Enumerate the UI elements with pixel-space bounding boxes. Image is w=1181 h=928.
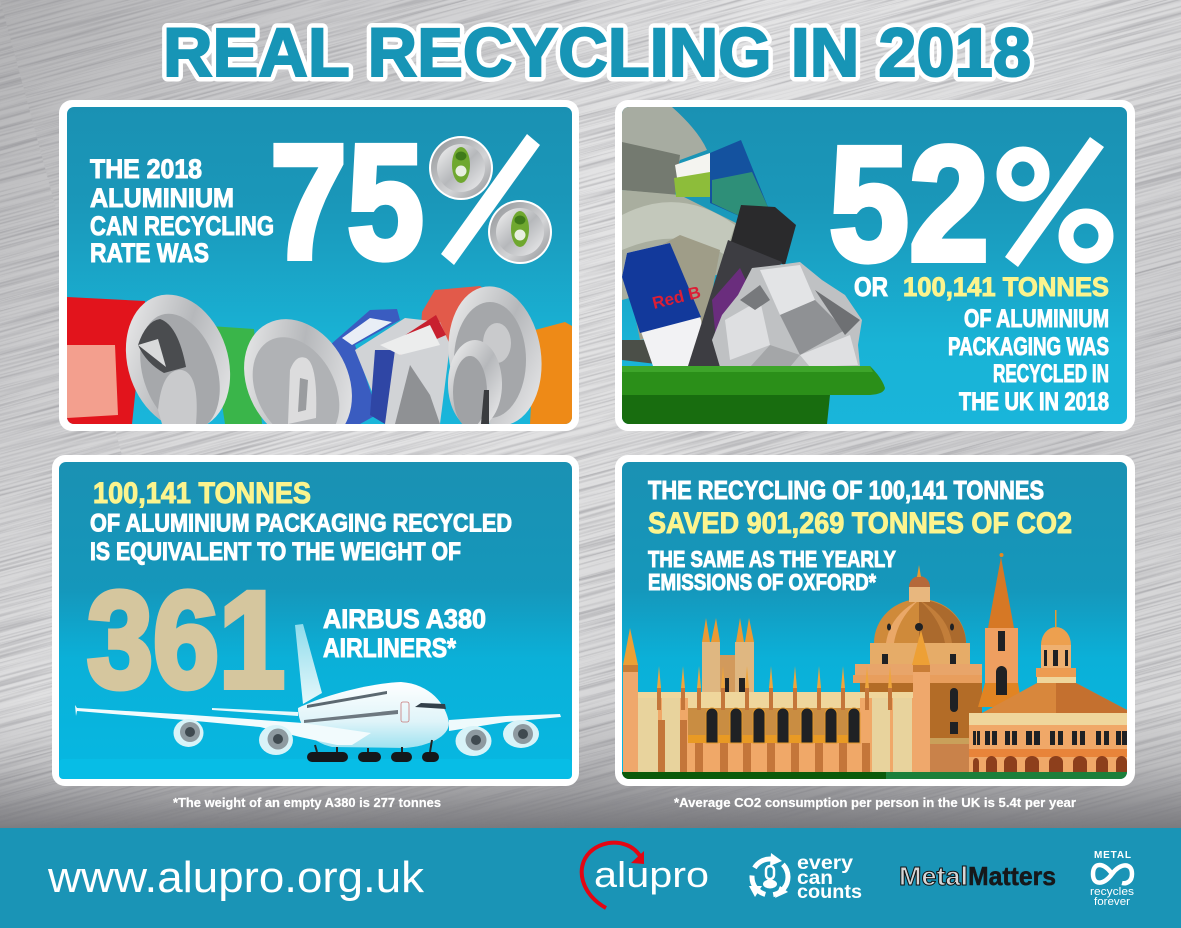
heading: can recycling rate: CAN RECYCLING: [90, 211, 274, 241]
stat: 75 percent: [270, 110, 552, 293]
logo: metal recycles forever: forever: [1094, 896, 1130, 908]
logo: metal recycles forever: recycles: [1090, 886, 1135, 898]
heading: can recycling rate: RATE WAS: [90, 238, 209, 268]
logo: alupro: [582, 843, 709, 908]
text: tonnes recycled: 100,141 TONNES: [903, 272, 1109, 302]
panel: aluminium packaging recycled: [615, 100, 1135, 431]
panel: airbus equivalent: [52, 455, 579, 786]
logo: metal matters: Metal: [899, 861, 968, 891]
text: weight comparison: [90, 477, 512, 566]
logo: alupro: alupro: [594, 854, 709, 895]
text: tonnes recycled: RECYCLED IN: [993, 360, 1109, 388]
footnote: co2 per person: *Average CO2 consumption per person in the UK is 5.4t per year: [674, 796, 1076, 810]
stat: 52 percent: 52: [829, 112, 989, 295]
logo: every can counts: [749, 853, 862, 903]
text: tonnes recycled: [854, 272, 1109, 416]
church spire: [978, 553, 1022, 707]
text: co2 savings: THE SAME AS THE YEARLY: [648, 546, 896, 572]
logo: metal recycles forever: [1090, 850, 1135, 908]
text: tonnes recycled: PACKAGING WAS: [948, 333, 1109, 361]
logo: every can counts: counts: [797, 882, 862, 903]
logo: metal recycles forever: METAL: [1094, 850, 1131, 861]
label: airbus a380 airliners: AIRLINERS*: [323, 633, 456, 663]
heading: can recycling rate: THE 2018: [90, 154, 202, 184]
text: tonnes recycled: THE UK IN 2018: [959, 388, 1109, 416]
logo: metal matters: Matters: [968, 861, 1056, 891]
logo: every can counts: every: [797, 853, 853, 874]
logo: metal matters: [899, 861, 1056, 891]
panel: co2 saved: [615, 455, 1135, 786]
ground: [622, 772, 1127, 779]
title: REAL RECYCLING IN 2018: [163, 14, 1031, 91]
heading: can recycling rate: [90, 154, 274, 268]
image: crushed cans: [67, 286, 572, 424]
text: weight comparison: IS EQUIVALENT TO THE WEIGHT OF: [90, 538, 461, 566]
corner towers: [623, 628, 930, 772]
text: tonnes recycled: OR: [854, 272, 888, 302]
label: airbus a380 airliners: AIRBUS A380: [323, 604, 486, 634]
text: co2 savings: EMISSIONS OF OXFORD*: [648, 569, 876, 595]
image: airbus a380: [75, 624, 561, 762]
website url: www.alupro.org.uk: [47, 853, 425, 902]
illustration: oxford skyline: [622, 553, 1127, 779]
text: weight comparison: 100,141 TONNES: [93, 477, 311, 510]
radcliffe rotunda: [969, 610, 1127, 772]
heading: can recycling rate: ALUMINIUM: [90, 183, 234, 213]
image: recycling bin with packaging: Red B: [650, 283, 703, 313]
text: co2 savings: [648, 475, 1072, 595]
back towers: [702, 618, 754, 692]
panel: aluminium can recycling rate: [59, 100, 579, 464]
logo: every can counts: can: [797, 868, 833, 889]
stat: 361: 361: [87, 564, 285, 717]
text: weight comparison: OF ALUMINIUM PACKAGING RECYCLED: [90, 510, 512, 538]
main college hall: [638, 666, 913, 772]
title: REAL RECYCLING IN 2018: [163, 14, 1031, 91]
stat: 75 percent: 75: [270, 110, 424, 293]
stat: 52 percent: [829, 112, 1106, 295]
text: co2 savings: SAVED 901,269 TONNES OF CO2: [648, 507, 1072, 540]
text: co2 savings: THE RECYCLING OF 100,141 TONNES: [648, 475, 1044, 505]
footnote: a380 weight: *The weight of an empty A380 is 277 tonnes: [173, 796, 441, 810]
text: tonnes recycled: OF ALUMINIUM: [964, 305, 1109, 333]
oxford dome building: [853, 565, 982, 773]
footer band: [0, 828, 1181, 928]
image: recycling bin with packaging: [622, 107, 885, 424]
label: airbus a380 airliners: [323, 604, 486, 663]
